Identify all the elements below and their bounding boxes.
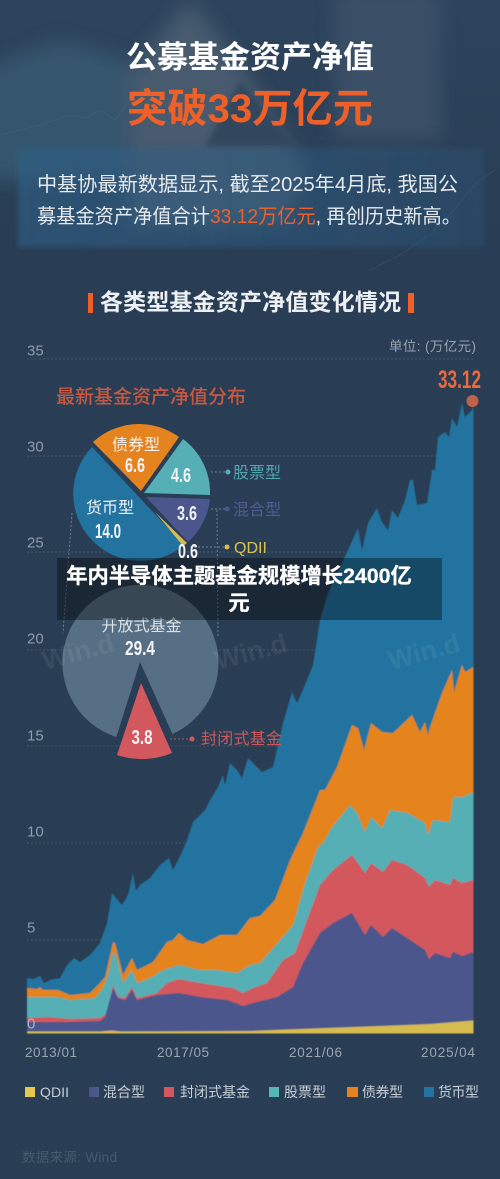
pie labels: 0.6: [178, 541, 198, 563]
watermarks: Win.d: [39, 628, 117, 676]
pie labels: open and closed: [101, 617, 182, 749]
area: bond funds: [27, 665, 474, 1033]
title: 公募基金资产净值: [126, 40, 374, 75]
source note: 数据来源: Wind: [22, 1150, 117, 1165]
callout: latest total: [438, 366, 481, 407]
leader lines: [63, 472, 226, 636]
legend: 股票型: [284, 1084, 326, 1100]
x axis labels: 2017/05: [157, 1045, 209, 1060]
slice: bond 6.6: [93, 424, 179, 491]
slice: open-end 29.4: [62, 585, 218, 737]
pie labels: 3.6: [177, 503, 197, 525]
y axis labels: 10: [27, 824, 44, 840]
pie labels: 6.6: [125, 455, 145, 477]
pie labels: [86, 436, 198, 563]
legend: 混合型: [103, 1084, 145, 1100]
y axis labels: 15: [27, 728, 44, 744]
pie labels: 14.0: [95, 521, 121, 543]
pie labels: open and closed: 29.4: [125, 638, 156, 660]
legend callouts: 股票型: [233, 464, 281, 482]
callout: closed-end funds: 封闭式基金: [201, 730, 282, 748]
pie labels: 货币型: [86, 499, 134, 517]
area: mixed funds: [27, 913, 474, 1033]
pie: latest distribution of open-end funds: [73, 424, 210, 561]
slice: QDII 0.6: [155, 512, 187, 546]
legend: 封闭式基金: [180, 1084, 250, 1100]
text block: intro paragraph: [37, 173, 461, 228]
pie labels: open and closed: 开放式基金: [101, 617, 182, 635]
pie labels: open and closed: 3.8: [132, 727, 152, 749]
pie labels: 4.6: [171, 465, 191, 487]
legend callouts: [224, 464, 281, 557]
text block: intro paragraph: 募基金资产净值合计33.12万亿元, 再创历史新高。: [37, 205, 461, 228]
unit label: 单位: (万亿元): [389, 339, 476, 354]
y axis labels: 20: [27, 630, 44, 648]
slice: closed-end 3.8: [117, 683, 172, 759]
x axis labels: 2021/06: [289, 1045, 342, 1060]
x axis labels: 2025/04: [421, 1045, 475, 1060]
callout: latest total: 33.12: [438, 366, 481, 394]
legend: 债券型: [362, 1084, 403, 1100]
slice: mixed 3.6: [146, 497, 210, 542]
area: equity funds: [27, 792, 474, 1033]
heading: chart section: 各类型基金资产净值变化情况: [100, 289, 401, 315]
area: money market funds: [27, 403, 474, 1033]
watermarks: Win.d: [385, 628, 463, 676]
callout: closed-end funds: [170, 730, 282, 748]
area: closed-end funds: [27, 855, 474, 1033]
overlay banner: 年内半导体主题基金规模增长2400亿: [66, 563, 412, 588]
legend callouts: QDII: [234, 540, 267, 557]
slice: money market 14.0: [73, 447, 184, 561]
y axis labels: 30: [27, 438, 44, 456]
area: QDII funds: [27, 1020, 474, 1034]
y axis labels: 0: [27, 1016, 35, 1032]
chart: stacked area of fund net assets: [27, 403, 474, 1034]
slice: equity 4.6: [144, 439, 210, 495]
watermarks: Win.d: [212, 628, 290, 676]
y axis labels: 35: [27, 342, 44, 360]
panel: intro background: [18, 148, 484, 247]
legend: [25, 1084, 479, 1100]
title: 突破33万亿元: [127, 87, 373, 131]
legend callouts: 混合型: [233, 501, 281, 519]
y axis labels: 25: [27, 534, 44, 552]
x axis labels: 2013/01: [25, 1045, 77, 1060]
y axis labels: 5: [27, 920, 35, 936]
watermarks: [39, 628, 463, 676]
x axis labels: [25, 1045, 475, 1060]
legend: 货币型: [438, 1084, 479, 1100]
pie heading: 最新基金资产净值分布: [56, 386, 246, 408]
y axis labels: [27, 342, 44, 1032]
overlay banner: [57, 558, 442, 620]
legend: QDII: [40, 1084, 69, 1100]
title: [126, 40, 374, 131]
overlay banner: 元: [228, 591, 250, 615]
pie: open-end vs closed-end: [62, 585, 218, 759]
text block: intro paragraph: 中基协最新数据显示, 截至2025年4月底, 我国公: [37, 173, 458, 196]
pie labels: 债券型: [112, 436, 160, 454]
